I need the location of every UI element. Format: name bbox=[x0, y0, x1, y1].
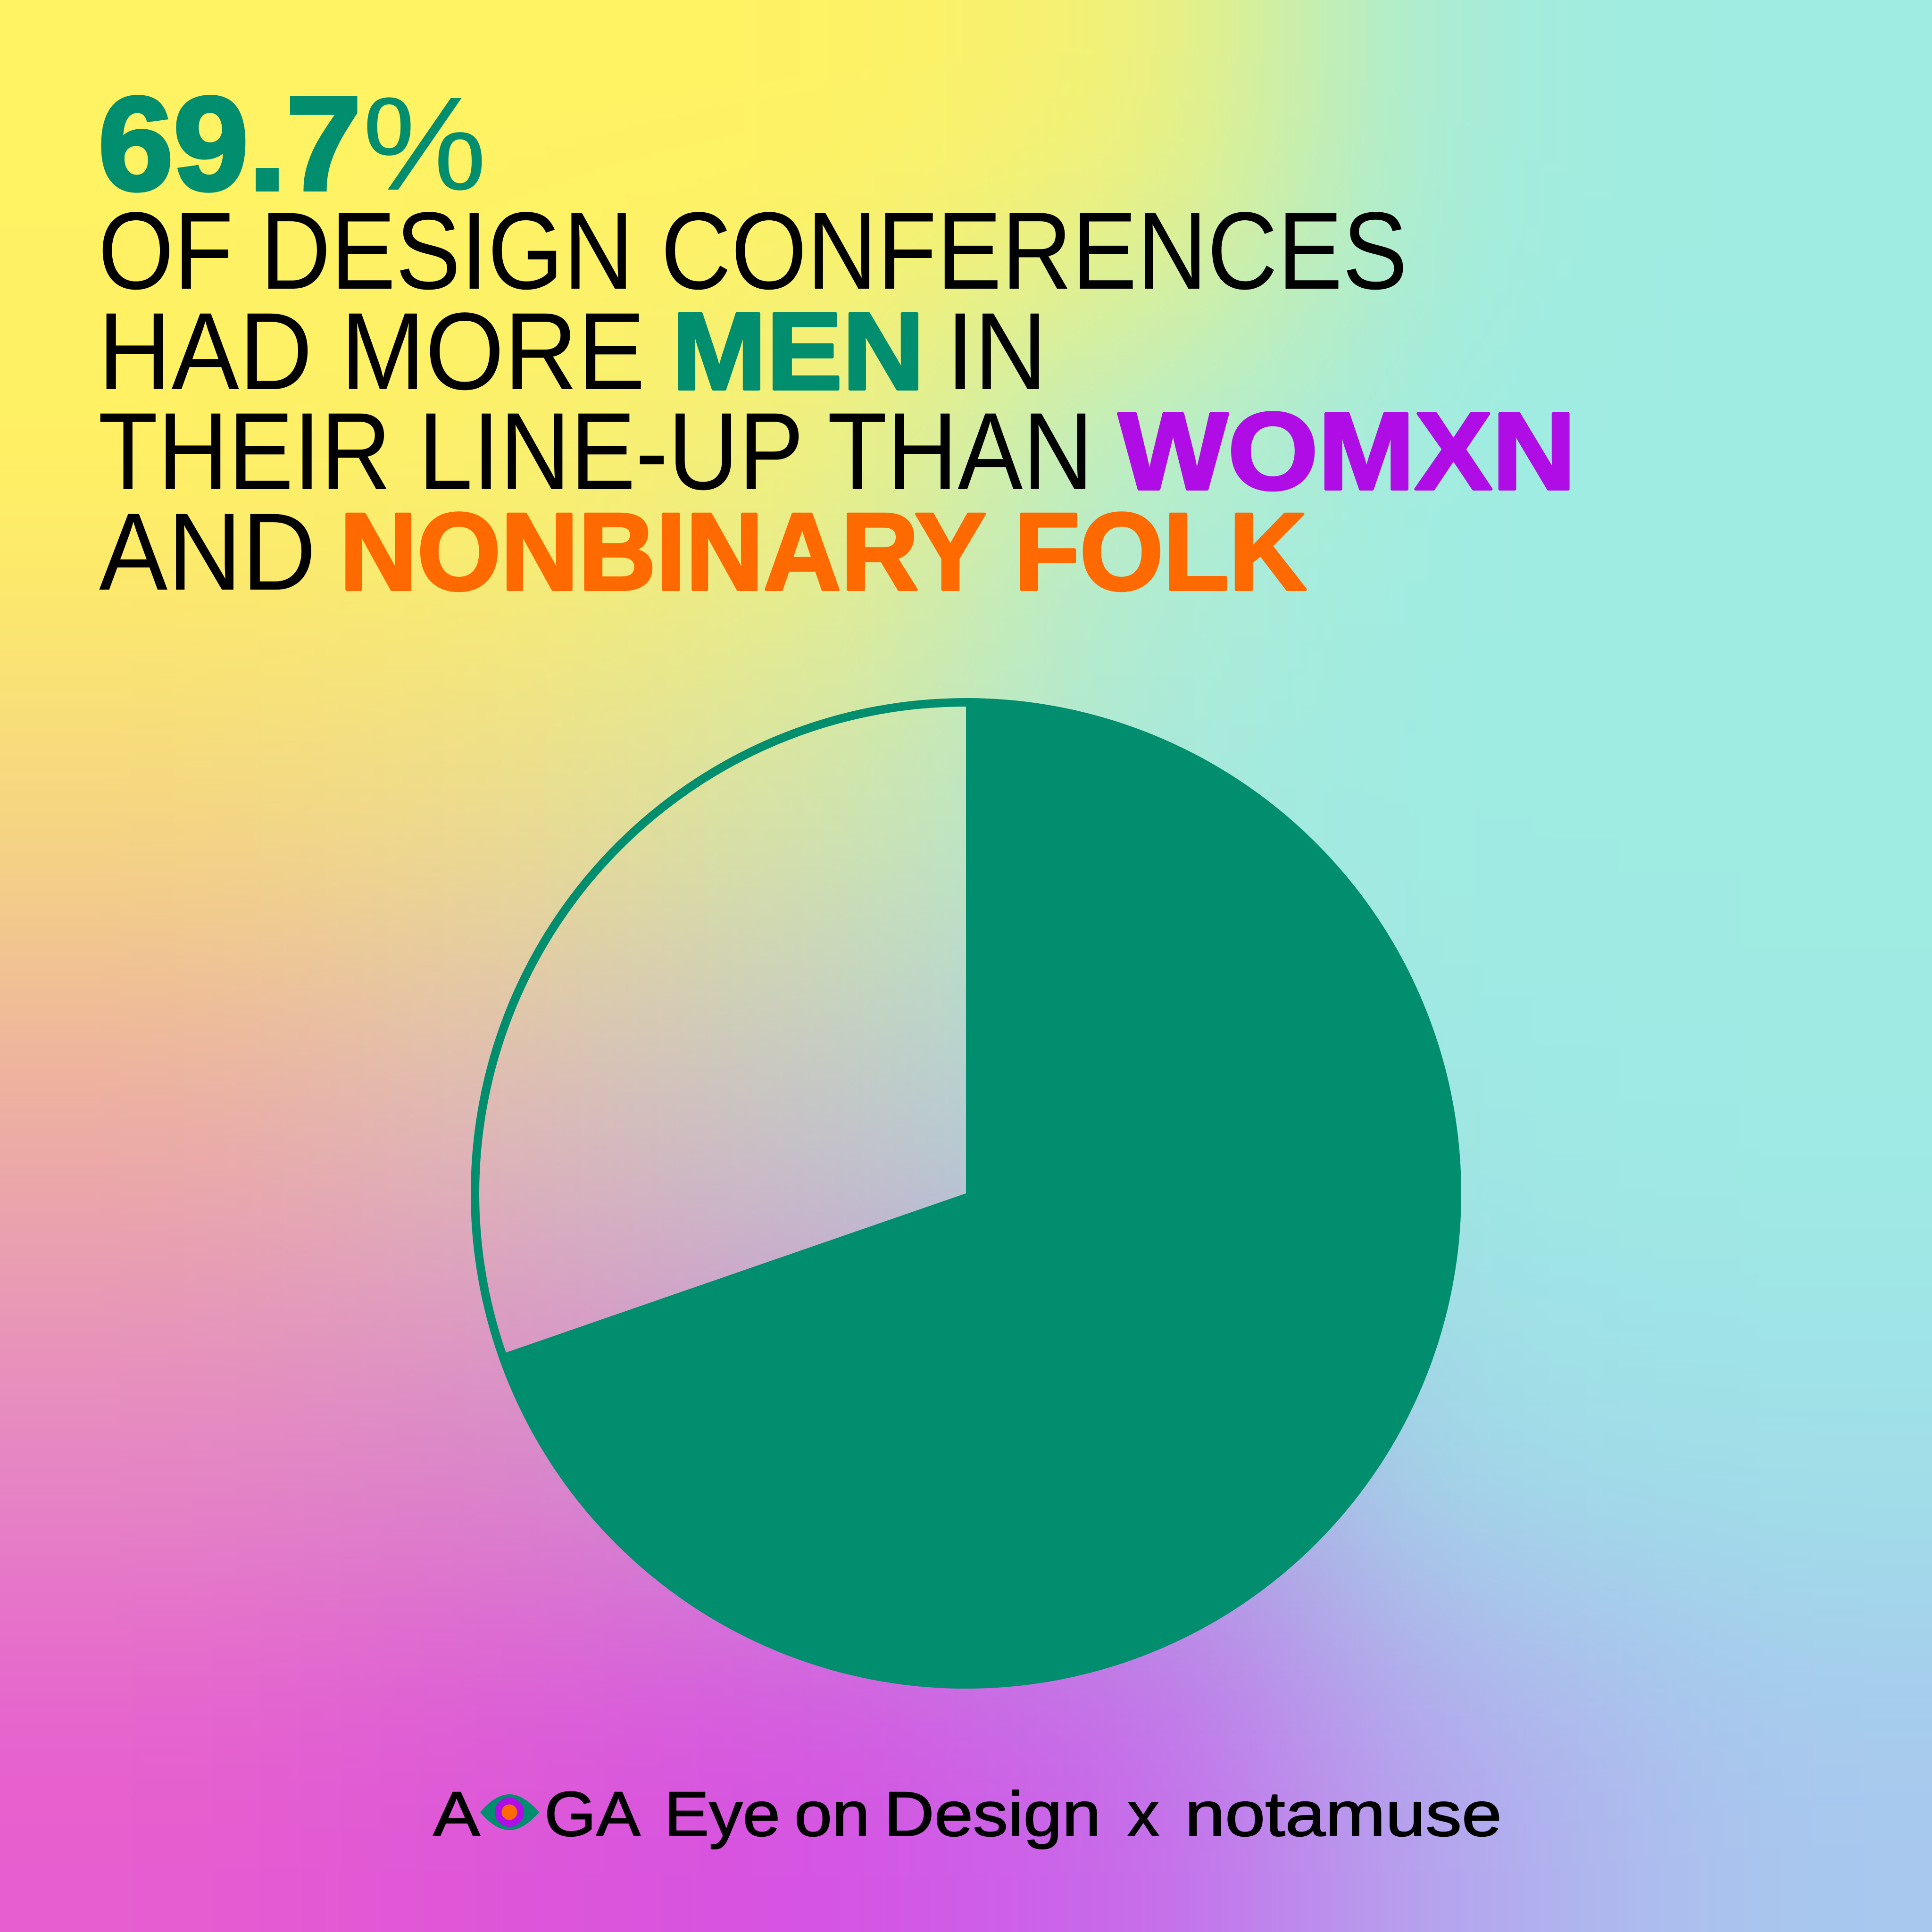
headline line 3: WOMXN bbox=[1118, 390, 1576, 513]
headline line 2: MEN bbox=[672, 290, 924, 413]
headline line 4: NONBINARY FOLK bbox=[340, 491, 1307, 613]
headline bbox=[98, 69, 1576, 613]
headline line 2 bbox=[98, 290, 1047, 413]
footer credit: notamuse bbox=[1185, 1779, 1502, 1849]
footer credit: Eye bbox=[664, 1779, 780, 1849]
icon: eye bbox=[480, 1794, 539, 1830]
big statistic 69.7%: % bbox=[362, 69, 487, 218]
headline line 1: OF DESIGN CONFERENCES bbox=[98, 190, 1407, 312]
headline line 2: IN bbox=[946, 290, 1047, 413]
pie wedge 69.7% bbox=[498, 698, 1461, 1689]
headline line 3: THEIR LINE-UP THAN bbox=[98, 390, 1093, 513]
footer credit: x bbox=[1127, 1779, 1159, 1849]
footer credit bbox=[433, 1779, 1502, 1849]
big statistic 69.7% bbox=[98, 69, 487, 218]
headline line 2: HAD MORE bbox=[98, 290, 645, 413]
big statistic 69.7%: 69.7 bbox=[98, 69, 361, 218]
footer credit: on bbox=[794, 1779, 870, 1849]
pie outline ring bbox=[475, 702, 1457, 1684]
footer credit: Design bbox=[884, 1779, 1101, 1849]
pie chart: 69.7 percent bbox=[475, 698, 1461, 1689]
headline line 4: AND bbox=[99, 491, 316, 613]
footer credit: GA bbox=[544, 1779, 641, 1849]
footer credit: A bbox=[433, 1779, 481, 1849]
